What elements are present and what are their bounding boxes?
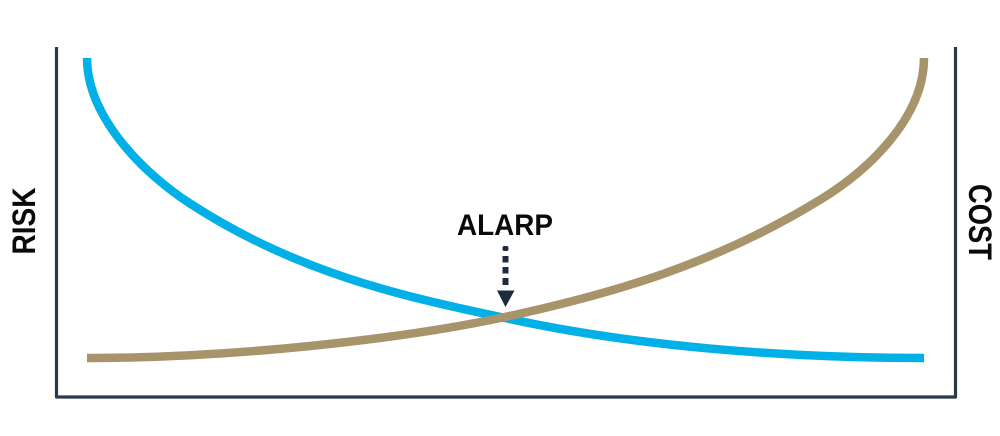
blue risk curve (87, 58, 924, 358)
chart axes (56, 47, 956, 397)
left axis label: RISK: RISK (6, 188, 42, 254)
right axis label: COST: COST (962, 184, 998, 260)
dotted arrow pointing to the curve crossing (497, 246, 514, 307)
tan cost curve (87, 58, 924, 358)
ALARP label: ALARP (457, 209, 553, 242)
